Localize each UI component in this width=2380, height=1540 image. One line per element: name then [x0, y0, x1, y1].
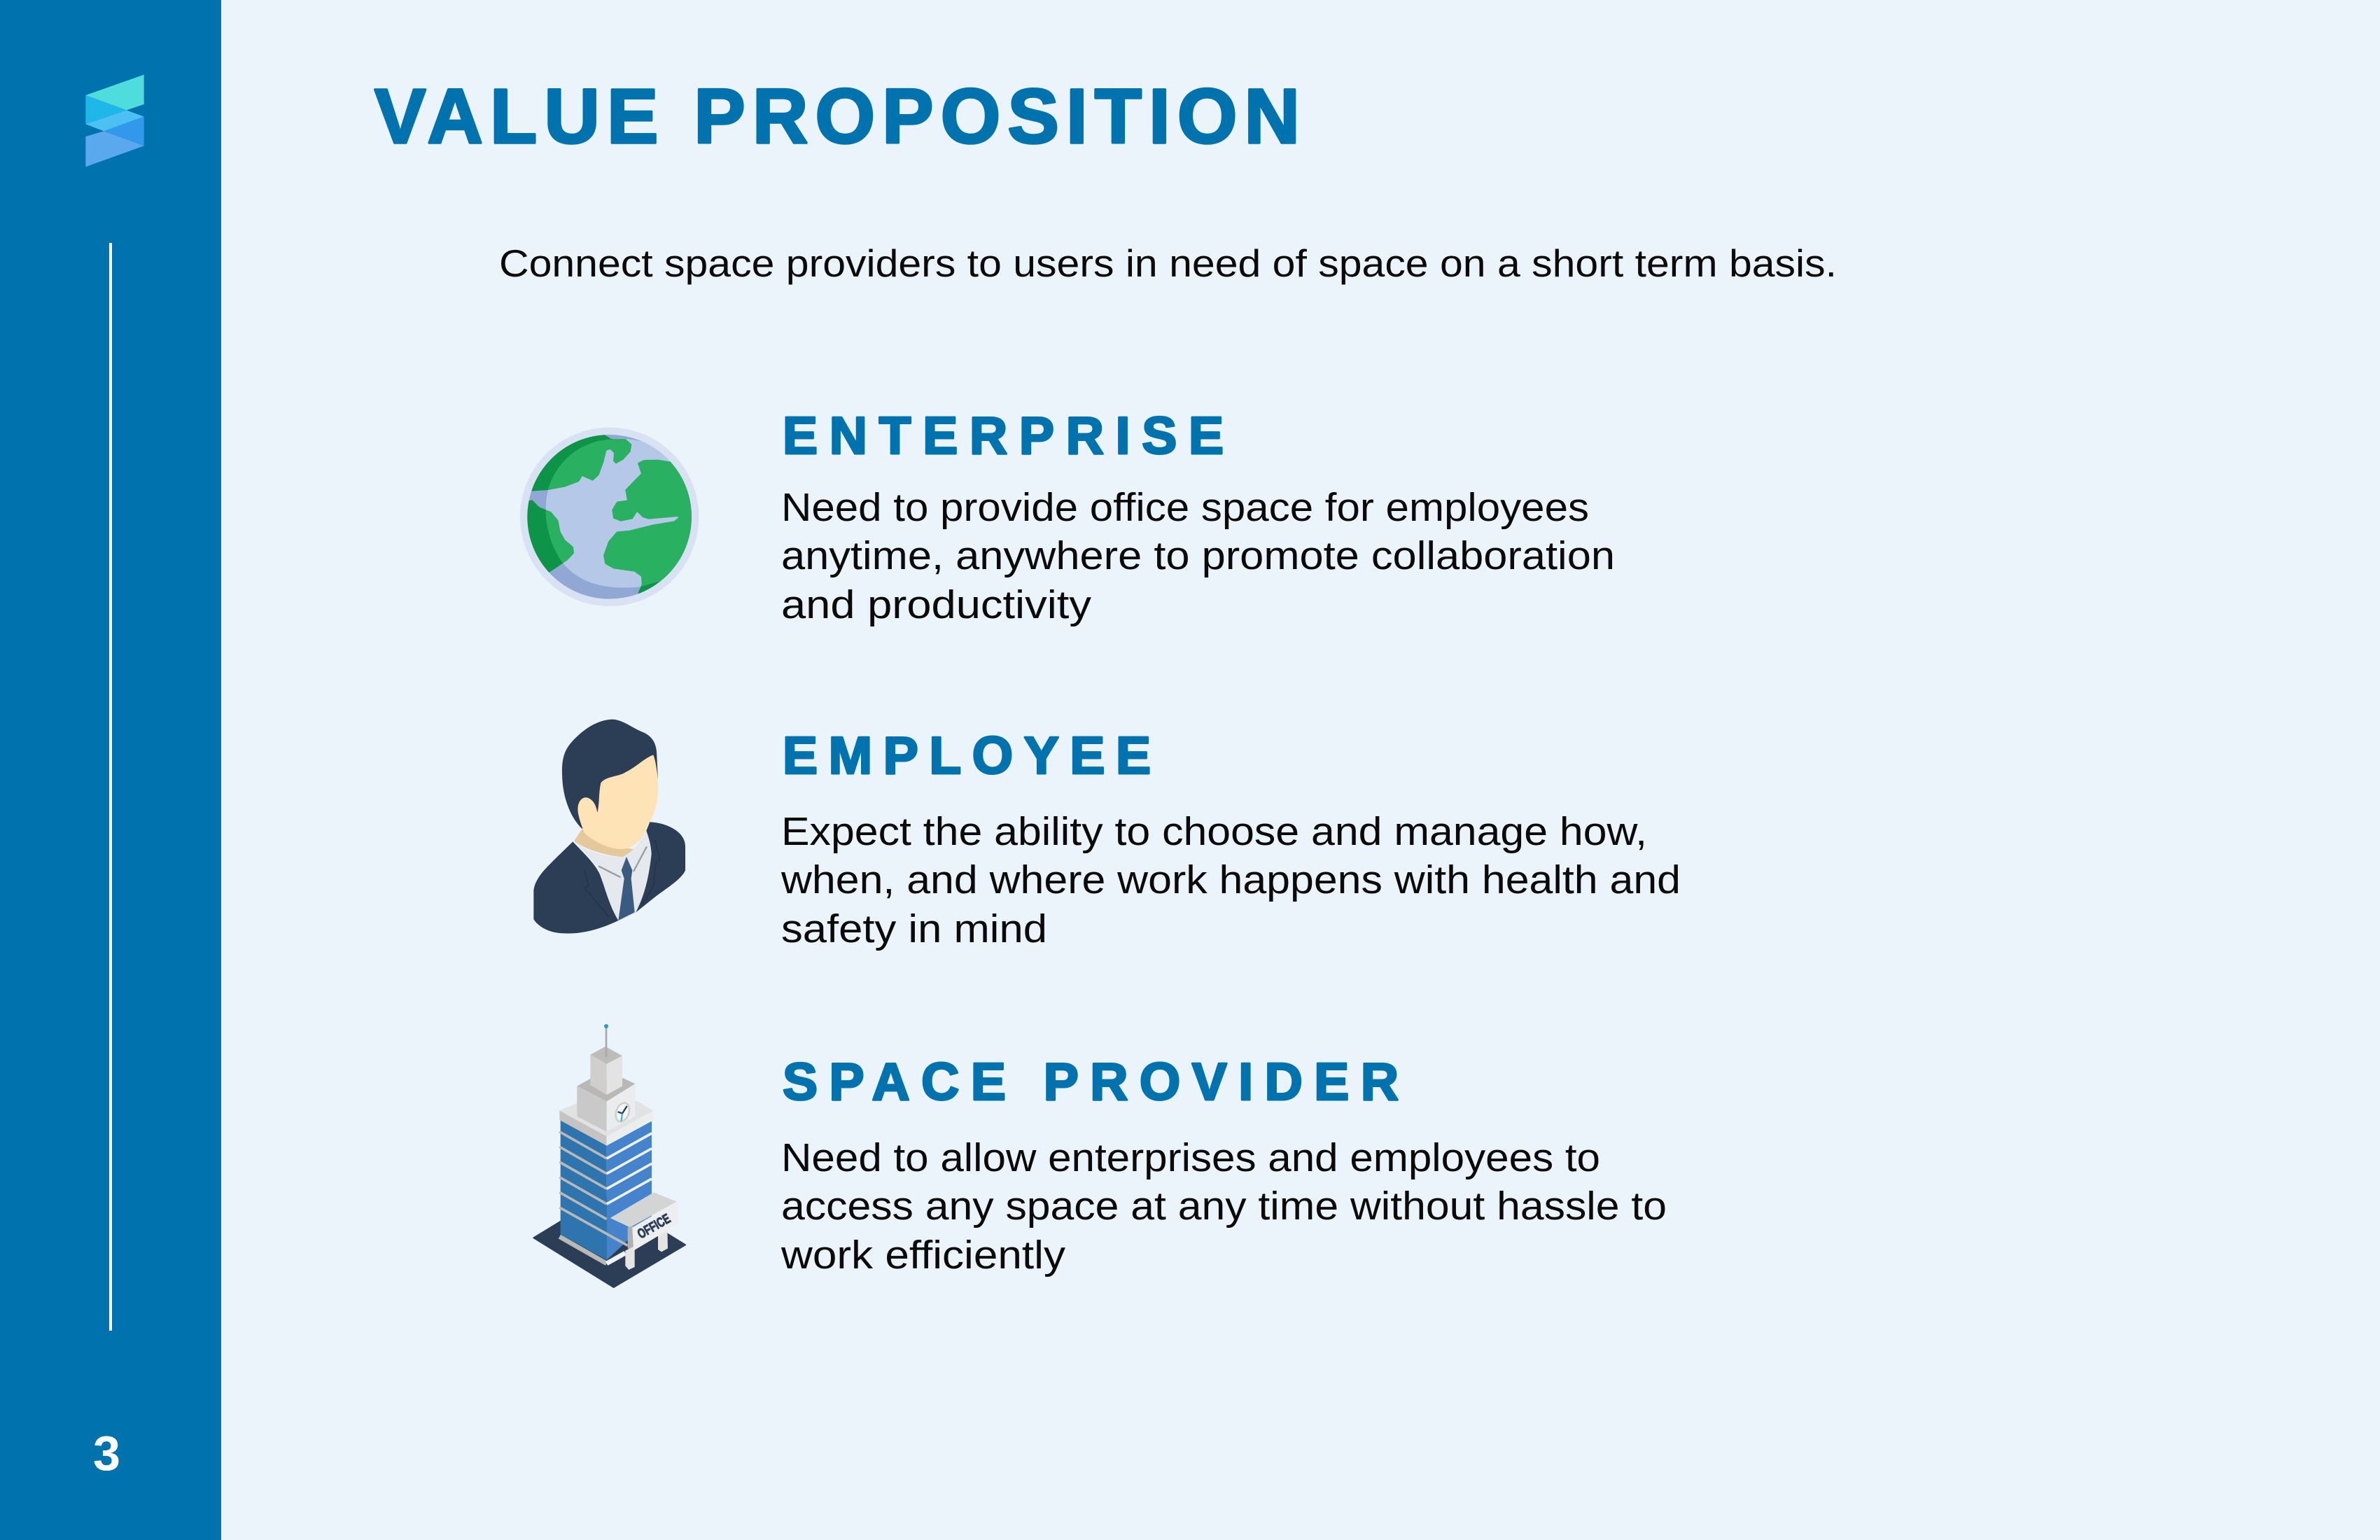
text block: enterprise description: and productivity: [781, 582, 1092, 627]
heading: employee: EMPLOYEE: [783, 726, 1151, 785]
page number: 3: [93, 1426, 120, 1480]
text block: space provider description: work efficiently: [780, 1233, 1066, 1278]
title: VALUE PROPOSITION: [374, 74, 1300, 160]
icon: office building: [533, 1024, 685, 1287]
text block: space provider description: access any space at any time without hassle to: [781, 1184, 1667, 1228]
text block: employee description: safety in mind: [781, 906, 1047, 951]
text block: enterprise description: Need to provide office space for employees: [781, 485, 1589, 530]
icon: globe: [520, 427, 699, 606]
panel: blue sidebar: [0, 0, 221, 1540]
text block: enterprise description: [781, 485, 1615, 627]
office sign: OFFICE: [635, 1212, 673, 1242]
icon: company logo: [85, 75, 144, 167]
heading: enterprise: ENTERPRISE: [783, 406, 1224, 465]
subtitle: Connect space providers to users in need of space on a short term basis.: [499, 241, 1837, 285]
text block: space provider description: Need to allow enterprises and employees to: [781, 1135, 1600, 1180]
heading: space provider: SPACE PROVIDER: [783, 1052, 1399, 1111]
text block: employee description: when, and where work happens with health and: [780, 858, 1681, 902]
text block: employee description: Expect the ability to choose and manage how,: [781, 809, 1647, 854]
icon: businessman: [533, 720, 685, 934]
text block: employee description: [780, 809, 1681, 951]
text block: enterprise description: anytime, anywhere to promote collaboration: [781, 533, 1615, 578]
text block: space provider description: [780, 1135, 1667, 1278]
